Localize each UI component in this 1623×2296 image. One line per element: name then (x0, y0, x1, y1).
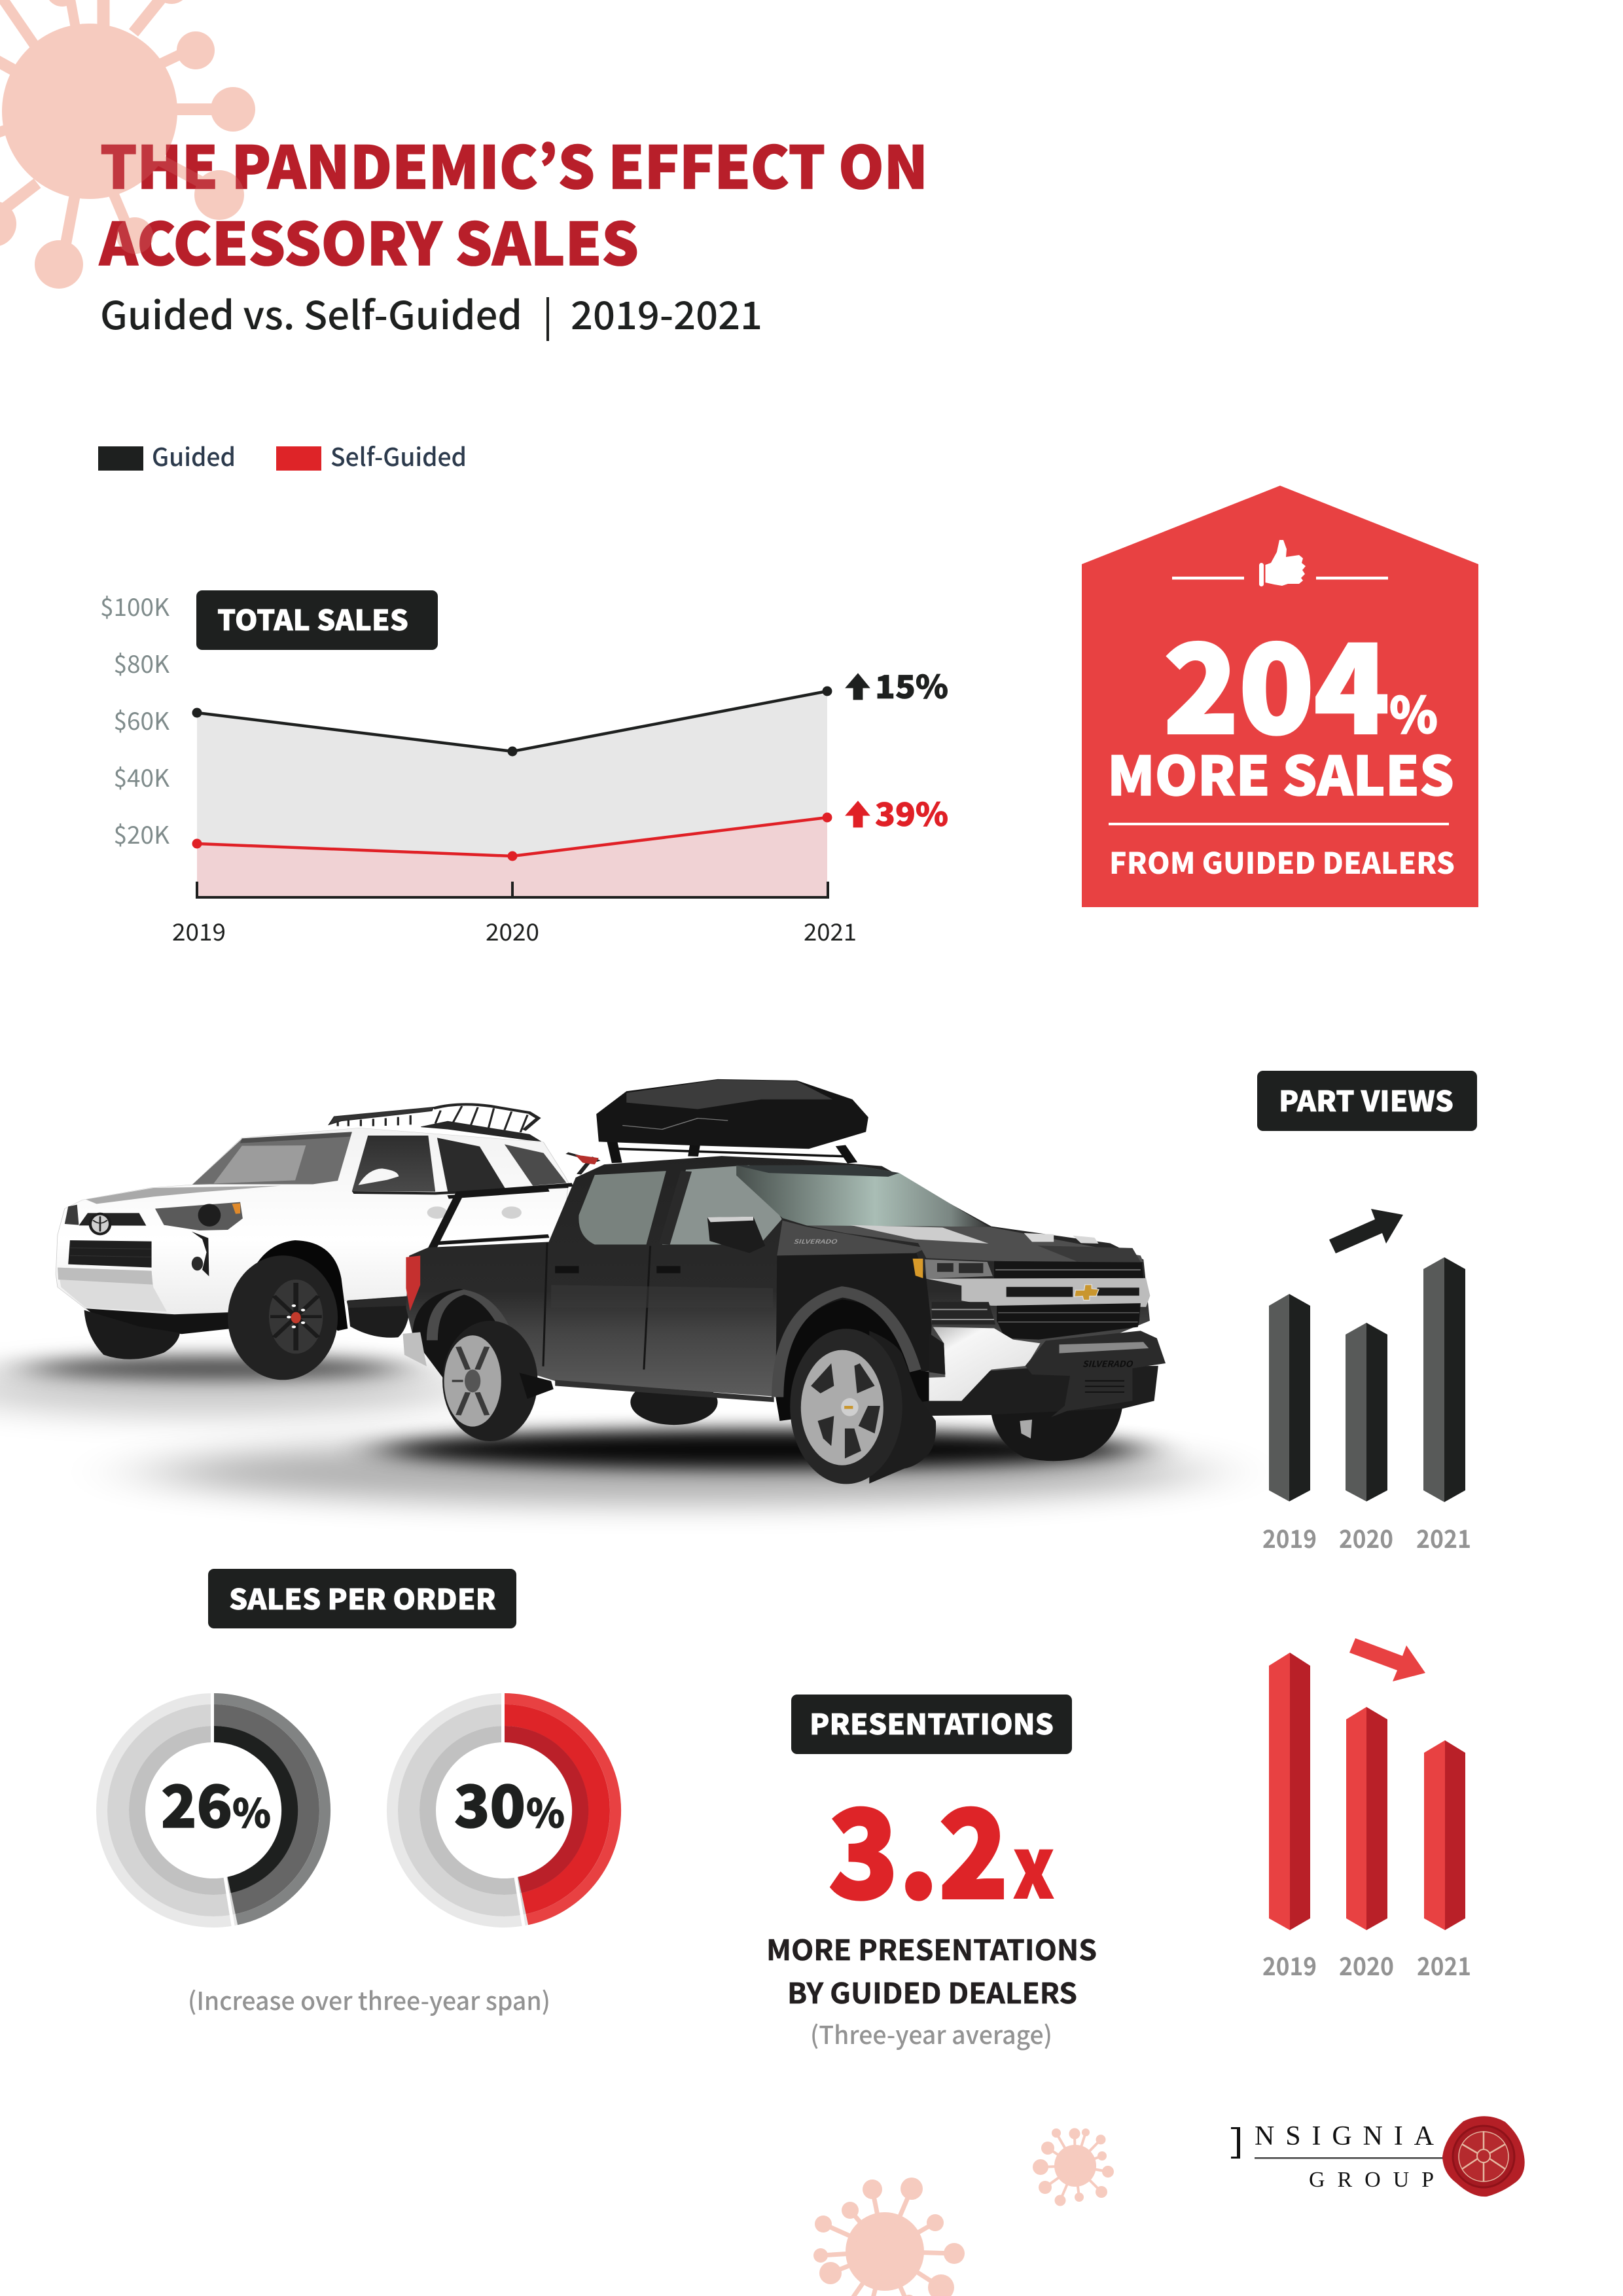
panel: 204% more sales (1082, 486, 1478, 907)
value: 26 (161, 1760, 232, 1844)
bar 2020 (1346, 1323, 1387, 1501)
icon: thumbs up (1172, 540, 1388, 586)
headlight (155, 1202, 243, 1230)
roof cargo box (596, 1079, 868, 1149)
bowtie emblem (1075, 1285, 1099, 1300)
text: from guided dealers: FROM GUIDED DEALERS (1109, 840, 1455, 882)
chart area: guided (197, 691, 827, 897)
subtitle: Guided vs. Self-Guided (100, 285, 522, 340)
y axis labels: $60K (113, 702, 169, 737)
donut chart: 26% (102, 1689, 325, 1929)
main front wheel (228, 1255, 338, 1380)
bed rack (432, 1185, 573, 1248)
x axis years (172, 914, 857, 948)
year labels: 2021 (1417, 1946, 1471, 1982)
bar 2019 (1269, 1294, 1310, 1501)
title: THE PANDEMIC’S EFFECT ON (100, 121, 928, 206)
legend: Guided (152, 437, 236, 473)
self-guided line (192, 813, 832, 861)
ground shadows (0, 1356, 1198, 1505)
virus: bottom small (1033, 2128, 1114, 2206)
rear bumper (403, 1332, 427, 1367)
roof rack (329, 1104, 540, 1141)
black pickup truck: front end (736, 1166, 1166, 1484)
chart area: self-guided (197, 817, 827, 897)
donut chart: 30% (393, 1689, 616, 1929)
black pickup truck: rear and cab (403, 1079, 1150, 1441)
subtitle: 2019-2021 (571, 285, 762, 340)
y axis labels: $20K (113, 816, 169, 851)
callout: guided up 15% (846, 662, 948, 708)
fog light and side vent (192, 1232, 209, 1276)
white suv (56, 1104, 568, 1380)
underbody (86, 1308, 232, 1334)
bar 2020 (1346, 1707, 1387, 1930)
door handles (555, 1266, 579, 1273)
text: more sales: MORE SALES (1107, 733, 1454, 811)
hood (807, 1225, 1143, 1262)
year labels: 2020 (1339, 1946, 1394, 1982)
tag: sales per order (208, 1569, 516, 1628)
x axis years: 2021 (804, 914, 857, 948)
wax seal (1442, 2116, 1525, 2197)
bull bar (1026, 1331, 1166, 1417)
side windows (579, 1171, 666, 1245)
bar 2021 (1424, 1740, 1465, 1930)
panel: presentations (766, 1695, 1097, 2051)
text: more presentations by guided dealers: BY GUIDED DEALERS (787, 1971, 1077, 2012)
logo: insignia group (1231, 2116, 1525, 2197)
taillight (406, 1255, 420, 1311)
y axis labels: $80K (113, 645, 169, 680)
arrow up (1329, 1209, 1403, 1253)
title: ACCESSORY SALES (99, 198, 639, 282)
value: % (232, 1782, 271, 1839)
lower grille (997, 1303, 1141, 1340)
tag: total sales (196, 590, 438, 650)
chrome bumper (908, 1327, 1040, 1401)
axis (197, 882, 828, 897)
legend: Self-Guided (330, 437, 467, 473)
line chart: total sales (100, 588, 948, 948)
mirror (707, 1217, 765, 1253)
year labels: 2021 (1416, 1519, 1471, 1555)
front wheel arch and flare (776, 1299, 929, 1421)
wordmark (1231, 2121, 1444, 2192)
chrome grille band (926, 1278, 1150, 1307)
mud flap (520, 1373, 554, 1399)
callout: self-guided up 39%: 39% (875, 789, 948, 836)
silverado badge: SILVERADO (793, 1236, 838, 1246)
lower bumper (913, 1366, 1158, 1416)
mesh grille (68, 1240, 152, 1268)
rear wheel (347, 1296, 410, 1338)
subtitle (100, 285, 762, 341)
bar chart: part views (1262, 1209, 1471, 1555)
tag: total sales: TOTAL SALES (217, 598, 408, 639)
year labels: 2019 (1262, 1946, 1317, 1982)
x axis years: 2019 (172, 914, 226, 948)
virus: top left (0, 0, 255, 289)
rear wheel arch and flare (412, 1289, 547, 1392)
year labels: 2019 (1262, 1519, 1317, 1555)
windshield (736, 1166, 989, 1227)
text: more presentations by guided dealers: MORE PRESENTATIONS (766, 1928, 1097, 1969)
fender (776, 1251, 932, 1396)
tag: sales per order: SALES PER ORDER (229, 1577, 496, 1618)
y axis labels: $100K (100, 588, 169, 623)
virus: bottom large (813, 2178, 965, 2296)
lower bumper (58, 1268, 167, 1312)
y axis labels (100, 588, 169, 851)
door handles (427, 1206, 447, 1219)
legend (98, 437, 467, 473)
title (99, 121, 928, 282)
caption: increase over three-year span: (Increase over three-year span) (188, 1981, 550, 2017)
upper grille and emblem (65, 1205, 79, 1225)
hood shading (86, 1186, 281, 1204)
far front wheel (991, 1408, 1122, 1461)
upper grille (994, 1261, 1143, 1278)
hidden rear wheel (630, 1379, 718, 1425)
x axis years: 2020 (486, 914, 539, 948)
body (56, 1128, 568, 1314)
black pickup truck: front end: SILVERADO (1082, 1357, 1133, 1370)
illustration: two vehicles with accessories (0, 1079, 1198, 1505)
tag: presentations: PRESENTATIONS (810, 1702, 1054, 1743)
rear wheel (442, 1321, 538, 1441)
callout: guided up 15%: 15% (875, 662, 948, 708)
cargo box rack (612, 1138, 853, 1163)
guided line (192, 686, 832, 757)
side windows (352, 1136, 435, 1192)
tag: part views (1257, 1071, 1477, 1131)
headlight (925, 1259, 993, 1279)
year labels: 2020 (1339, 1519, 1393, 1555)
pickup body (406, 1156, 1150, 1402)
year labels (1262, 1519, 1471, 1555)
tag: presentations (791, 1695, 1072, 1754)
front wheel (790, 1329, 936, 1484)
value: 30 (454, 1760, 526, 1844)
bar 2019 (1269, 1653, 1310, 1930)
stat: 204%: 204 (1164, 591, 1389, 769)
arrow down (1349, 1638, 1425, 1681)
text: more presentations by guided dealers (766, 1928, 1097, 2012)
left front wheel (84, 1310, 180, 1359)
bike carrier (567, 1153, 599, 1174)
year labels (1262, 1946, 1471, 1982)
wheel arch (245, 1240, 348, 1331)
stat: 3.2x: 3.2 (829, 1756, 1008, 1933)
caption: three-year average: (Three-year average) (810, 2015, 1052, 2051)
virus tint over title (2, 24, 244, 254)
bar 2021 (1423, 1257, 1465, 1502)
wordmark: GROUP (1309, 2168, 1434, 2192)
door reflection (551, 1285, 773, 1308)
value: % (526, 1782, 565, 1839)
value (454, 1760, 565, 1844)
windshield (192, 1132, 352, 1185)
callout: self-guided up 39% (846, 789, 948, 836)
stat: 3.2x: x (1013, 1801, 1054, 1923)
bar chart: red declining (1262, 1638, 1471, 1982)
tag: part views: PART VIEWS (1279, 1079, 1454, 1120)
wordmark: NSIGNIA (1255, 2121, 1435, 2151)
y axis labels: $40K (113, 759, 169, 794)
running board (555, 1380, 774, 1402)
stat: 204%: % (1389, 675, 1438, 747)
value (161, 1760, 271, 1844)
running board (347, 1297, 409, 1308)
